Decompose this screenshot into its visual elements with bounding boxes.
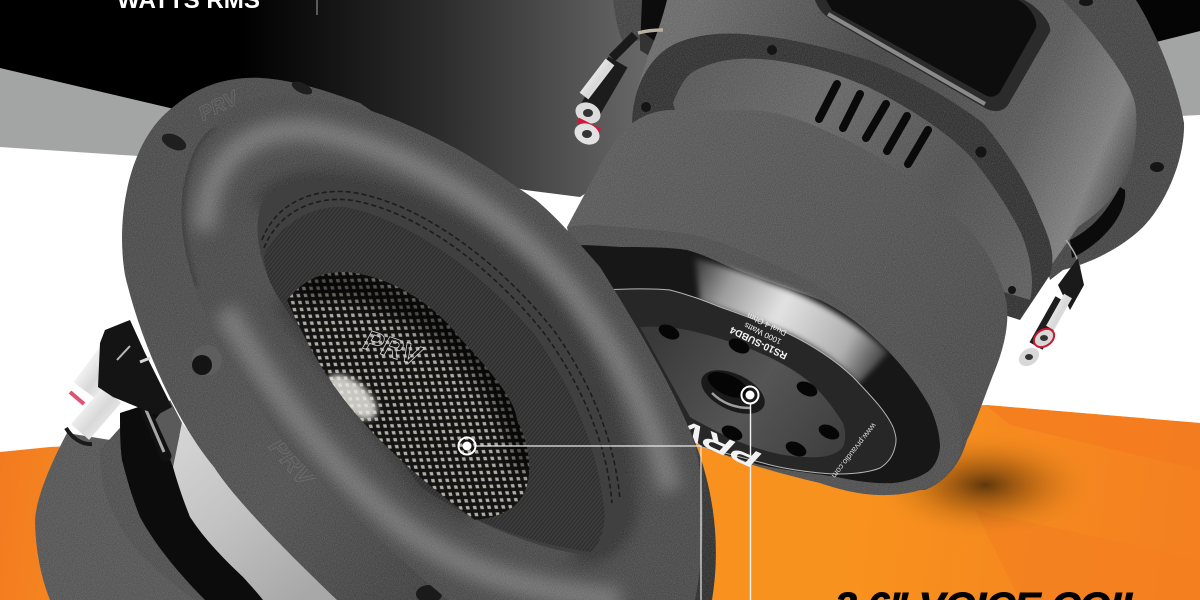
cone surround <box>258 180 628 554</box>
cone mesh <box>264 207 605 552</box>
background: left grey band <box>0 60 200 160</box>
front speaker black ring <box>120 400 270 600</box>
rear right terminal <box>1015 240 1084 370</box>
frame embossed logo bottom: PRV <box>263 432 322 494</box>
rear plate holes <box>656 321 842 460</box>
rear frame window opening <box>640 0 667 55</box>
rear subwoofer <box>567 0 1184 495</box>
rear back plate highlight band <box>695 258 888 384</box>
basket inner dome <box>673 59 1032 300</box>
front terminals <box>66 320 172 444</box>
background: top dark gradient band <box>0 0 1200 197</box>
front basket grey wedge <box>155 400 182 467</box>
carbon fibre dust cap: PRV <box>360 324 427 372</box>
front foam surround <box>181 95 703 600</box>
cone stitching <box>262 191 620 503</box>
background: orange floor <box>0 405 1200 600</box>
carbon fibre dust cap <box>287 272 529 520</box>
frame embossed logo top: PRV <box>195 86 243 125</box>
front subwoofer <box>35 78 716 600</box>
front terminal strap <box>146 412 166 456</box>
rear speaker drop shadow <box>870 430 1100 540</box>
front terminal strap highlight <box>146 410 164 452</box>
rear back plate black ring <box>575 245 940 483</box>
rear plate model text: RS10-SUBD4 <box>728 323 789 361</box>
rear speaker mounting frame <box>613 0 1184 280</box>
rear speaker magnet <box>567 110 1007 490</box>
rear plate label band <box>600 289 896 474</box>
background: top right black corner <box>1100 0 1200 50</box>
basket cooling slots <box>819 84 928 164</box>
rear speaker basket <box>632 0 1136 300</box>
callout: rear vent marker and leader line <box>742 386 758 600</box>
front mounting frame <box>122 78 716 600</box>
background: right grey band <box>1100 20 1200 120</box>
rear plate model text: Dual 4 Ohm <box>745 311 788 338</box>
basket large vent window <box>815 0 1050 111</box>
rear plate model text: 1000 Watts <box>743 320 783 346</box>
basket outer ring <box>632 34 1052 320</box>
rear plate logo: PRV <box>669 411 765 474</box>
front speaker magnet <box>35 433 200 600</box>
rear back plate rim <box>567 225 962 495</box>
rear left terminal <box>571 30 663 149</box>
rear frame gap <box>1070 187 1125 258</box>
divider line beside heading <box>316 0 318 15</box>
rear plate website text: www.prvaudio.com <box>830 421 879 480</box>
front speaker magnet rim <box>100 400 260 600</box>
basket screws <box>641 0 1164 294</box>
rear plate centre disc <box>640 327 845 457</box>
callout: dust cap marker and leader line <box>458 438 701 600</box>
frame mounting holes <box>159 79 442 600</box>
rear plate centre vent <box>695 361 771 423</box>
front basket light strip <box>173 423 345 600</box>
